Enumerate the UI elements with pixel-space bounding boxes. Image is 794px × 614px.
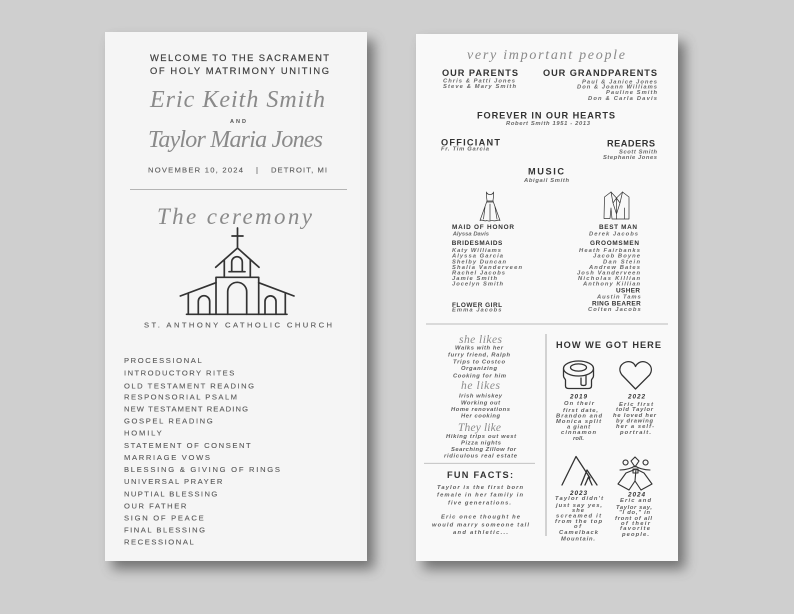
she likes: she likes xyxy=(459,334,503,346)
wedding party right: Josh Vanderveen xyxy=(577,270,640,276)
panel: ceremony page xyxy=(105,32,367,561)
icon: mountains xyxy=(562,456,597,485)
story 2022: Eric first xyxy=(619,402,654,408)
wedding party left: Jamie Smith xyxy=(452,276,497,282)
wedding party right: GROOMSMEN xyxy=(590,240,639,247)
story 2019: a giant xyxy=(567,425,591,431)
date and place: NOVEMBER 10, 2024 xyxy=(148,166,243,175)
our parents: OUR PARENTS xyxy=(442,68,518,78)
story 2023: Mountain. xyxy=(561,537,595,543)
wedding party left: MAID OF HONOR xyxy=(452,224,514,231)
readers: Scott Smith xyxy=(619,150,657,156)
story 2023: 2023 xyxy=(569,490,587,497)
story 2022: portrait. xyxy=(619,430,651,436)
our grandparents: Don & Carla Davis xyxy=(588,96,658,102)
very important people heading: very important people xyxy=(467,48,625,63)
our parents xyxy=(442,68,518,90)
he likes xyxy=(451,380,511,420)
icon: cinnamon roll xyxy=(564,361,594,388)
story 2024: front of all xyxy=(615,516,652,522)
story 2023: Taylor didn't xyxy=(555,496,604,502)
icon: jacket xyxy=(604,192,629,219)
story 2024: favorite xyxy=(620,526,651,532)
wedding party left: FLOWER GIRL xyxy=(452,302,502,309)
story 2022: told Taylor xyxy=(616,407,654,413)
they like: Hiking trips out west xyxy=(446,434,517,440)
and: AND xyxy=(230,119,246,125)
she likes: Organizing xyxy=(461,366,497,372)
music: Abigail Smith xyxy=(523,178,569,184)
wedding party left: Emma Jacobs xyxy=(452,308,502,314)
wedding party right: Heath Fairbanks xyxy=(579,248,641,254)
wedding party left: Katy Williams xyxy=(452,248,502,254)
story 2019: On their xyxy=(564,401,595,407)
wedding party left: Alyssa Garcia xyxy=(451,254,504,260)
story 2022: her a self- xyxy=(616,424,654,430)
wedding party right xyxy=(577,224,641,313)
date and place xyxy=(148,166,327,175)
our grandparents: OUR GRANDPARENTS xyxy=(543,68,657,78)
wedding party left: Rachel Jacobs xyxy=(452,270,506,276)
story 2019: 2019 xyxy=(569,394,587,401)
story 2023: screamed it xyxy=(556,514,602,520)
wedding party right: RING BEARER xyxy=(592,300,641,307)
story 2024: Taylor say, xyxy=(616,505,652,511)
welcome heading xyxy=(150,52,329,76)
they like: Pizza nights xyxy=(461,440,502,446)
order of service list: GOSPEL READING xyxy=(124,417,213,426)
story 2022: 2022 xyxy=(627,394,645,401)
how we got here heading: HOW WE GOT HERE xyxy=(556,340,661,350)
our grandparents: Paul & Janice Jones xyxy=(582,79,658,85)
order of service list: OLD TESTAMENT READING xyxy=(124,381,254,390)
order of service list: UNIVERSAL PRAYER xyxy=(124,477,223,486)
readers: READERS xyxy=(607,139,655,149)
order of service list: PROCESSIONAL xyxy=(124,356,202,365)
wedding party right: Derek Jacobs xyxy=(589,232,639,238)
wedding party right: Dan Stein xyxy=(603,259,640,265)
they like xyxy=(444,422,518,460)
forever in our hearts xyxy=(477,110,615,127)
forever in our hearts: FOREVER IN OUR HEARTS xyxy=(477,110,615,120)
our parents: Steve & Mary Smith xyxy=(443,84,516,90)
wedding party right: Nicholas Killian xyxy=(578,276,640,282)
wedding party right: BEST MAN xyxy=(599,224,637,231)
story 2023: just say yes, xyxy=(555,503,602,509)
she likes: Trips to Costco xyxy=(453,359,505,365)
date and place: DETROIT, MI xyxy=(271,166,327,175)
wedding party left: BRIDESMAIDS xyxy=(452,240,503,247)
they like: ridiculous real estate xyxy=(444,454,518,460)
wedding party right: Anthony Killian xyxy=(582,282,640,288)
music xyxy=(523,167,569,184)
order of service list: SIGN OF PEACE xyxy=(124,514,204,523)
date and place: | xyxy=(256,166,258,175)
fun facts: FUN FACTS: xyxy=(447,470,513,480)
she likes: furry friend, Ralph xyxy=(448,353,510,359)
fun facts: and athletic... xyxy=(453,530,508,536)
they like: Searching Zillow for xyxy=(451,447,517,453)
wedding party right: USHER xyxy=(616,288,640,295)
wedding party right: Colten Jacobs xyxy=(588,307,641,313)
story 2024 xyxy=(615,492,652,538)
story 2019: first date, xyxy=(563,408,598,414)
story 2019: cinnamon xyxy=(561,430,596,436)
she likes xyxy=(448,334,510,379)
order of service list: RESPONSORIAL PSALM xyxy=(124,393,237,402)
groom name: Eric Keith Smith xyxy=(149,87,325,113)
story 2023: Camelback xyxy=(559,530,599,536)
order of service list: HOMILY xyxy=(124,429,162,438)
icon: church xyxy=(180,228,294,314)
he likes: Working out xyxy=(461,401,501,407)
forever in our hearts: Robert Smith 1951 - 2013 xyxy=(506,121,591,127)
story 2023: from the top xyxy=(555,519,602,525)
fun facts: would marry someone tall xyxy=(432,523,529,529)
officiant xyxy=(441,138,500,153)
icon: wedding bells xyxy=(618,457,652,490)
they like: They like xyxy=(458,422,501,434)
order of service list: STATEMENT OF CONSENT xyxy=(124,441,251,450)
fun facts: female in her family in xyxy=(437,493,523,499)
our parents: Chris & Patti Jones xyxy=(443,79,516,85)
our grandparents: Don & Joann Williams xyxy=(577,85,658,91)
church name: ST. ANTHONY CATHOLIC CHURCH xyxy=(144,321,332,330)
story 2024: of their xyxy=(621,521,651,527)
music: MUSIC xyxy=(528,167,564,177)
wedding party left: Shelby Duncan xyxy=(452,259,506,265)
story 2023: she xyxy=(572,508,585,514)
welcome heading: OF HOLY MATRIMONY UNITING xyxy=(150,65,329,76)
story 2019: Brandon and xyxy=(556,414,602,420)
the ceremony heading: The ceremony xyxy=(157,204,313,229)
story 2019 xyxy=(556,394,602,442)
story 2022 xyxy=(613,394,657,436)
he likes: Home renovations xyxy=(451,407,511,413)
fun facts xyxy=(432,470,529,536)
bride name: Taylor Maria Jones xyxy=(148,127,323,153)
our grandparents: Pauline Smith xyxy=(606,90,657,96)
story 2024: people. xyxy=(621,532,649,538)
fun facts: Eric once thought he xyxy=(441,515,521,521)
story 2019: Monica split xyxy=(556,419,602,425)
order of service list: FINAL BLESSING xyxy=(124,526,205,535)
order of service list: NUPTIAL BLESSING xyxy=(124,489,217,498)
story 2022: he loved her xyxy=(613,413,657,419)
icon: heart xyxy=(620,362,651,389)
he likes: he likes xyxy=(461,380,501,392)
welcome heading: WELCOME TO THE SACRAMENT xyxy=(150,52,329,63)
order of service list: INTRODUCTORY RITES xyxy=(124,368,234,377)
order of service list: BLESSING & GIVING OF RINGS xyxy=(124,465,280,474)
officiant: OFFICIANT xyxy=(441,138,500,148)
order of service list: OUR FATHER xyxy=(124,501,187,510)
fun facts: five generations. xyxy=(448,501,511,507)
order of service list: NEW TESTAMENT READING xyxy=(124,405,248,414)
he likes: Irish whiskey xyxy=(459,393,503,399)
wedding party right: Austin Tams xyxy=(596,295,641,301)
icon: dress xyxy=(480,192,500,221)
our grandparents xyxy=(543,68,658,102)
story 2024: 2024 xyxy=(627,492,645,499)
he likes: Her cooking xyxy=(461,414,500,420)
page shadows xyxy=(112,40,685,569)
story 2023: of xyxy=(574,524,582,530)
wedding party left: Alyssa Davis xyxy=(452,232,490,238)
story 2024: "I do," in xyxy=(619,510,650,516)
wedding party left: Shalia Vanderveen xyxy=(452,265,522,271)
fun facts: Taylor is the first born xyxy=(437,485,523,491)
readers xyxy=(603,139,658,161)
wedding party left: Jocelyn Smith xyxy=(452,282,503,288)
officiant: Fr. Tim Garcia xyxy=(441,147,490,153)
wedding party right: Andrew Bates xyxy=(588,265,641,271)
panel: people page xyxy=(416,34,678,561)
wedding party left xyxy=(451,224,522,314)
story 2019: roll. xyxy=(573,436,584,442)
story 2024: Eric and xyxy=(620,498,651,504)
order of service list: RECESSIONAL xyxy=(124,537,194,546)
story 2023 xyxy=(555,490,604,543)
order of service list: MARRIAGE VOWS xyxy=(124,453,210,462)
story 2022: by drawing xyxy=(616,419,653,425)
readers: Stephanie Jones xyxy=(603,155,658,161)
wedding party right: Jacob Boyne xyxy=(593,254,641,260)
she likes: Cooking for him xyxy=(453,373,506,379)
she likes: Walks with her xyxy=(455,345,504,351)
order of service list xyxy=(124,356,280,546)
